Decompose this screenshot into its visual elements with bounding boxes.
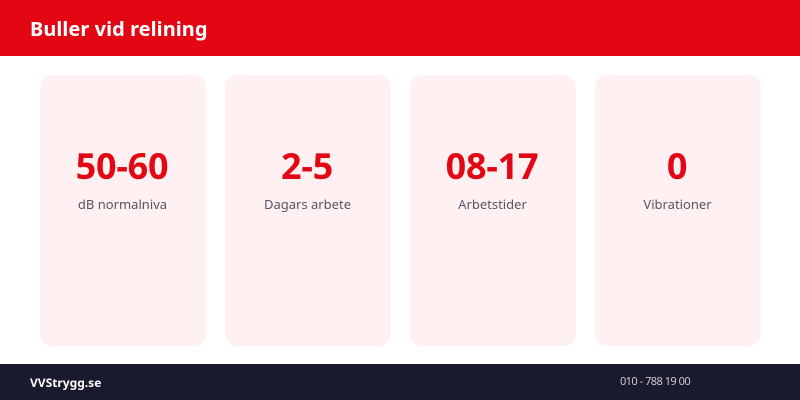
footer brand: VVStrygg.se — [30, 374, 101, 391]
header band — [0, 0, 800, 56]
stat value: 50-60: 50-60 — [76, 141, 168, 190]
footer phone number: 010 - 788 19 00 — [620, 374, 690, 389]
stat value: 0: 0 — [667, 141, 687, 190]
panel: Vibrationer — [595, 75, 761, 346]
stat value: 2-5: 2-5 — [281, 141, 333, 190]
stat label: dB normalniva: dB normalniva — [78, 195, 167, 213]
stat label: Dagars arbete: Dagars arbete — [264, 195, 351, 213]
panel: dB normalniva — [40, 75, 206, 346]
panel: Arbetstider — [410, 75, 576, 346]
stat value: 08-17: 08-17 — [446, 141, 538, 190]
stat label: Arbetstider: Arbetstider — [458, 195, 527, 213]
panel: Dagars arbete — [225, 75, 391, 346]
title: Buller vid relining — [30, 15, 208, 42]
stat label: Vibrationer: Vibrationer — [643, 195, 712, 213]
footer band — [0, 364, 800, 400]
